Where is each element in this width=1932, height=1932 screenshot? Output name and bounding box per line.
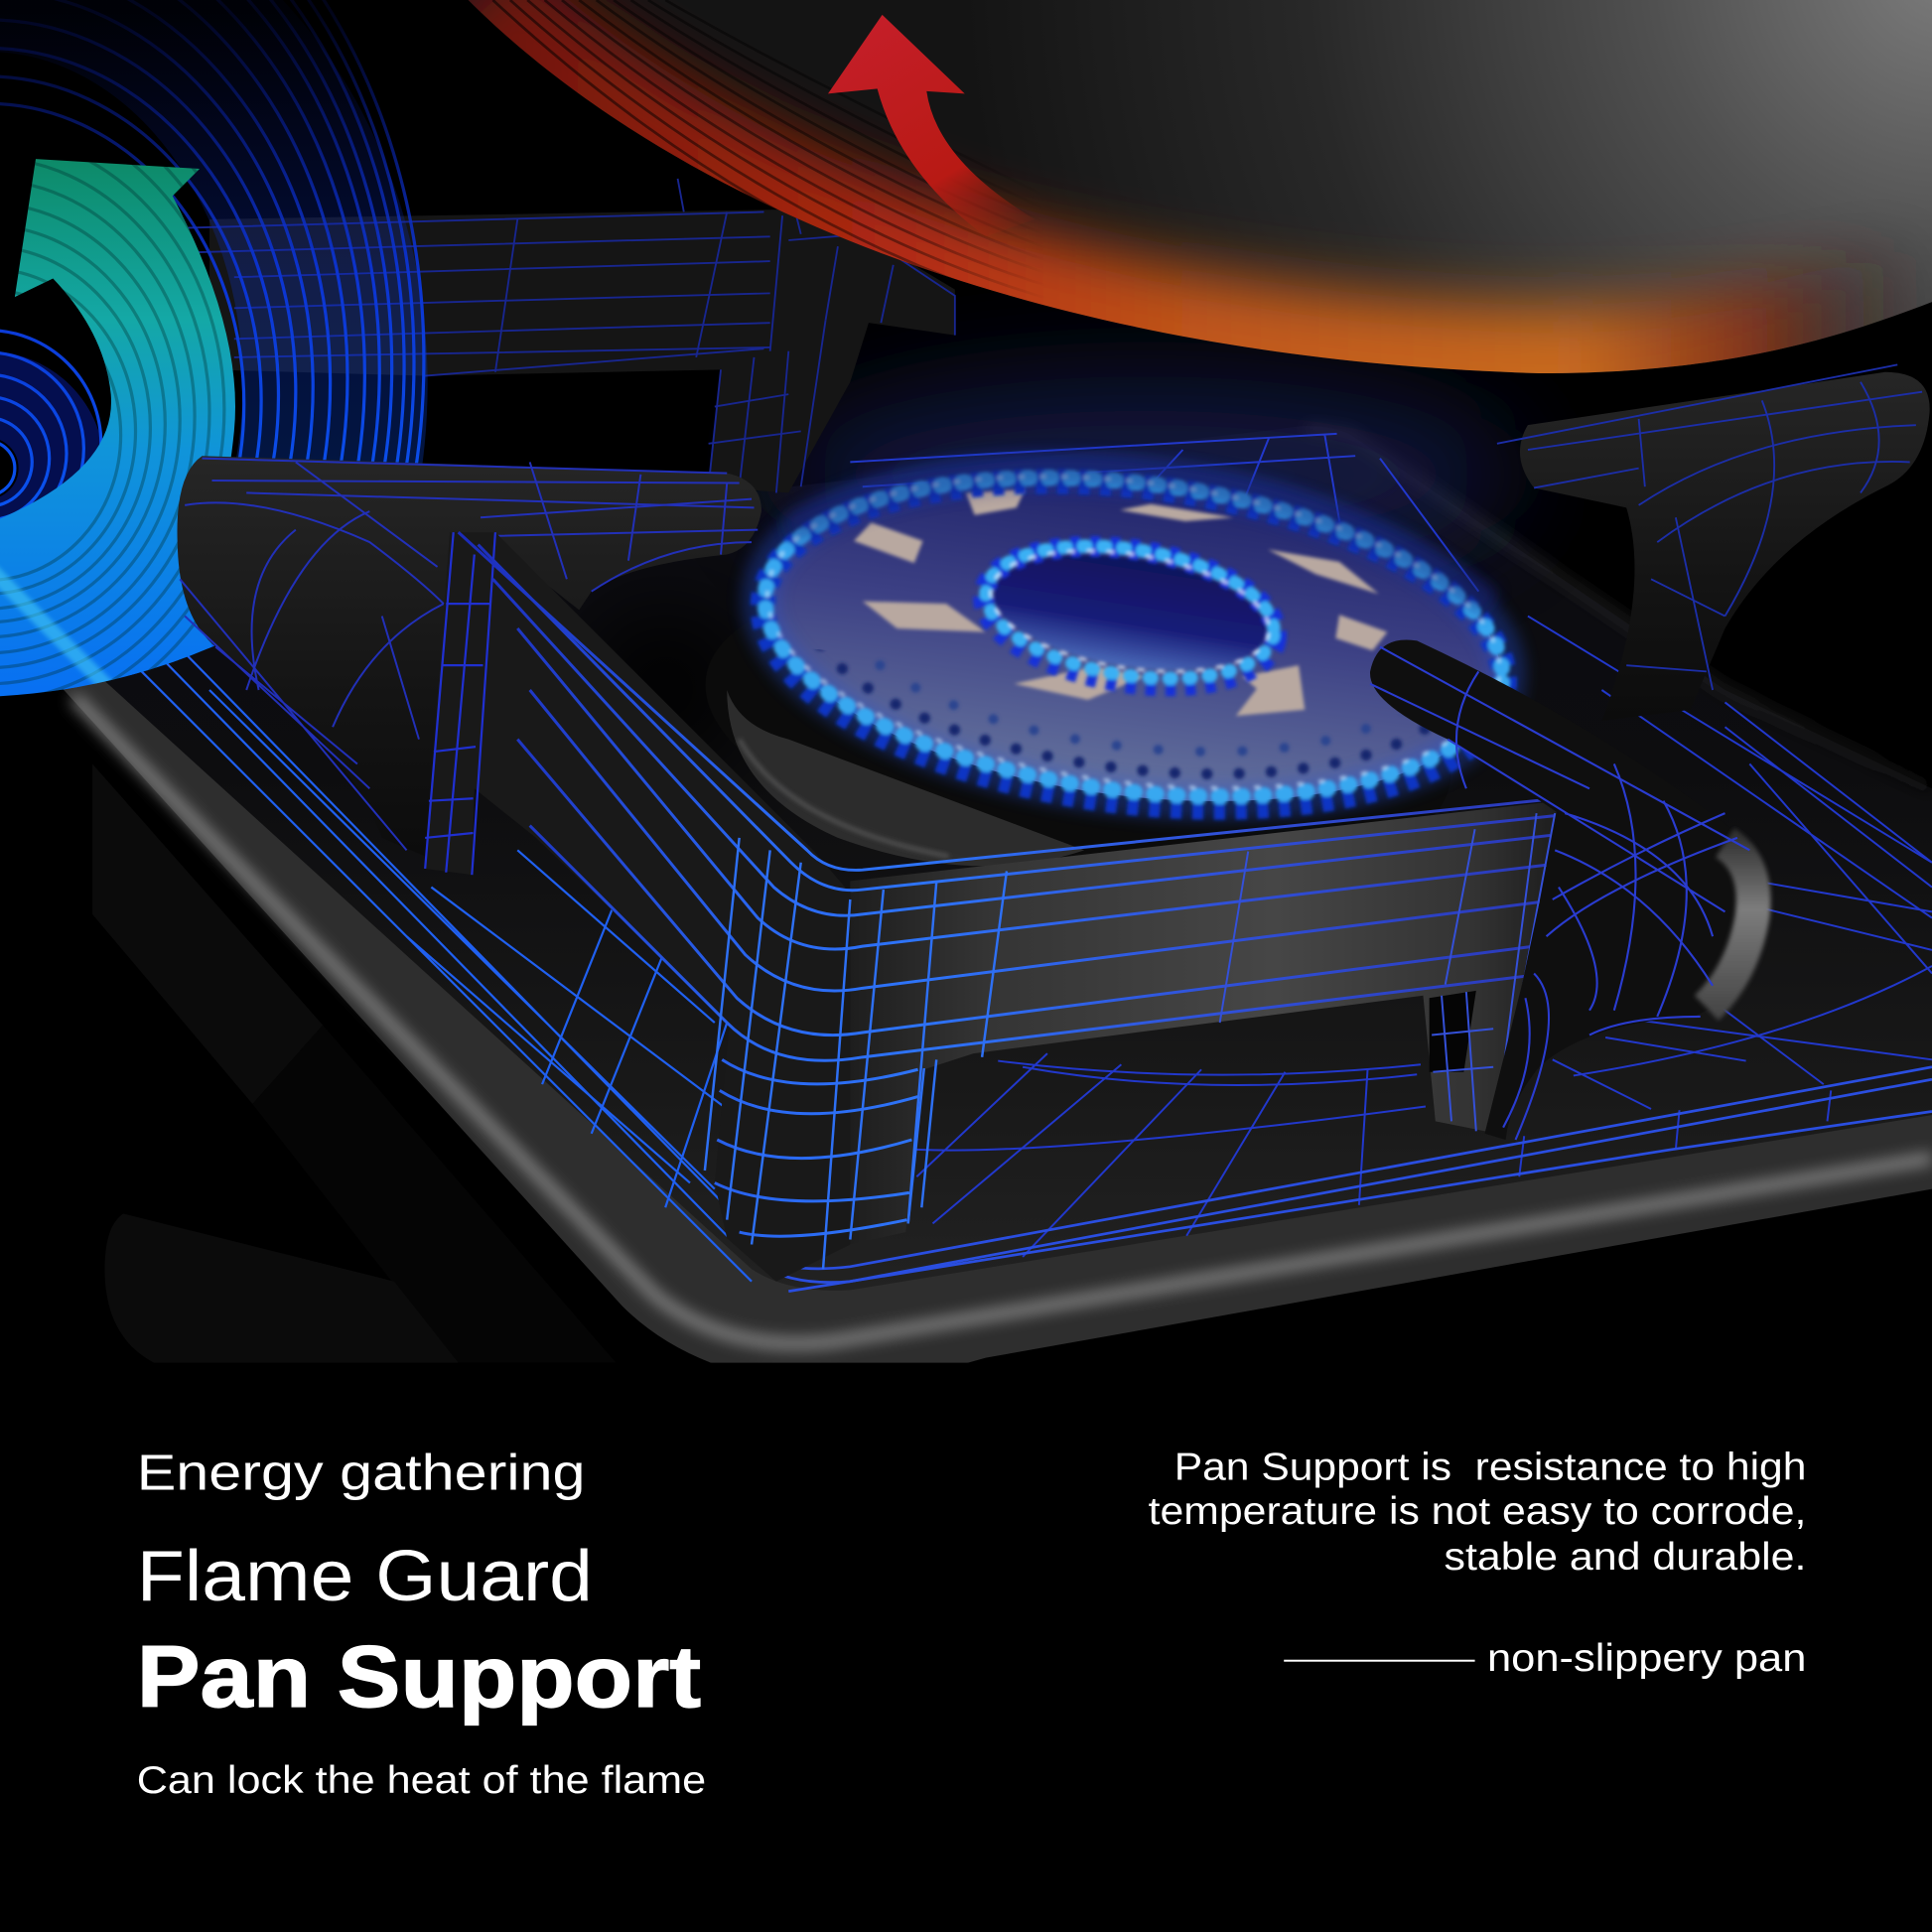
bar wireframe mesh xyxy=(459,532,1559,1269)
small leg shadow xyxy=(1430,991,1476,1072)
stove plate top surface xyxy=(73,426,1932,1291)
outer flames xyxy=(744,438,1523,847)
line: Energy gathering: Energy gathering xyxy=(137,1444,586,1500)
gas port perforations xyxy=(790,469,1477,808)
red heat lines xyxy=(492,0,1059,327)
arrow: red heat rising arrow xyxy=(828,15,1035,236)
left pan support xyxy=(178,456,761,857)
back left pan support xyxy=(185,179,955,492)
arrow: teal blue heat deflection arrow xyxy=(0,159,235,697)
burner: flame ring xyxy=(741,432,1526,847)
glow above burner xyxy=(776,376,1516,573)
description line 3: stable and durable. xyxy=(1445,1536,1806,1579)
plate wireframe mesh xyxy=(136,434,1932,1292)
stove plate rim xyxy=(62,640,1932,1386)
inner flames xyxy=(973,527,1287,705)
front right pan support arm xyxy=(1370,639,1768,1140)
veil dimming the far flames xyxy=(788,471,1491,604)
inner burner hole xyxy=(985,537,1275,687)
dark plate around burner xyxy=(579,604,752,776)
icon: left concentric heat rings xyxy=(0,0,428,690)
heading: Pan Support: Pan Support xyxy=(137,1627,701,1725)
outer glow xyxy=(741,432,1526,842)
description line 2: temperature is not easy to corrode, xyxy=(1149,1490,1806,1533)
line: Can lock the heat of the flame: Can lock the heat of the flame xyxy=(137,1759,706,1802)
pan heated rim xyxy=(469,0,1932,373)
text: left headings xyxy=(137,1444,706,1802)
text: right description xyxy=(1149,1447,1806,1579)
long side bar of pan support xyxy=(425,532,850,1282)
burner base xyxy=(686,533,1470,925)
plate back edge xyxy=(1307,429,1932,788)
support arm highlight edge xyxy=(1707,843,1753,1008)
tan reflection patches xyxy=(854,489,1387,716)
right pan support (back) xyxy=(1497,364,1930,721)
line: Flame Guard: Flame Guard xyxy=(137,1537,593,1616)
description line 1: Pan Support is resistance to high xyxy=(1174,1447,1806,1489)
illustration: gas stove burner xyxy=(0,0,1932,1386)
burner cap surface xyxy=(748,437,1520,840)
pan xyxy=(469,0,1932,373)
front bar of pan support xyxy=(850,801,1559,1244)
stove legs xyxy=(92,764,459,1362)
note text: non-slippery pan xyxy=(1487,1637,1806,1680)
